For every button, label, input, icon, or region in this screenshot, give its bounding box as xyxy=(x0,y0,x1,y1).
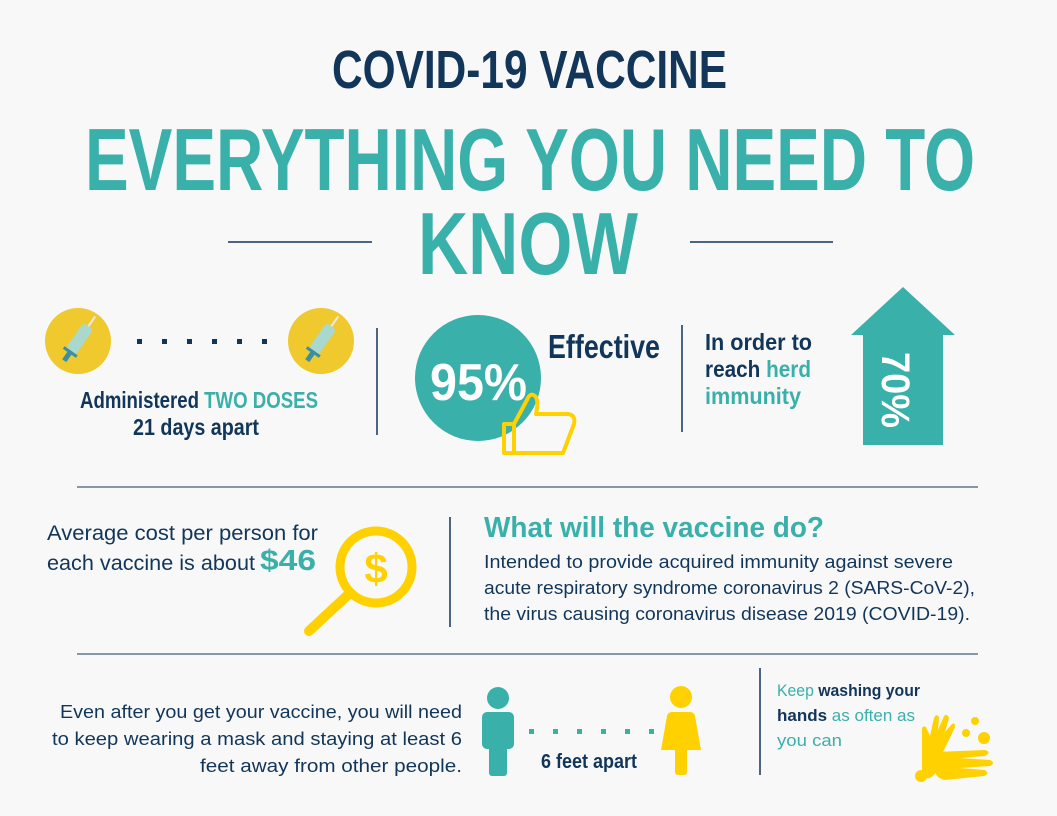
icon: magnifier: $ xyxy=(364,545,388,592)
panel: what will the vaccine do: Intended to provide acquired immunity against severe xyxy=(484,552,953,572)
panel: what will the vaccine do: the virus causing coronavirus disease 2019 (COVID-19). xyxy=(484,604,970,624)
icon: syringe 1 xyxy=(45,308,111,374)
panel: 95% effective: 95% xyxy=(430,354,527,412)
panel: 95% effective xyxy=(415,315,660,453)
icon: yellow person xyxy=(661,686,701,775)
title: KNOW xyxy=(418,194,638,293)
panel: masks and distance: feet away from other people. xyxy=(200,756,462,776)
panel: what will the vaccine do xyxy=(484,512,975,624)
panel: hand washing xyxy=(777,681,993,782)
panel: herd immunity xyxy=(705,287,955,445)
panel: hand washing: you can xyxy=(777,731,842,750)
panel: masks and distance xyxy=(52,686,701,776)
panel: masks and distance: Even after you get your vaccine, you will need xyxy=(60,702,462,722)
panel: cost: Average cost per person for xyxy=(47,522,318,545)
panel: hand washing: hands as often as xyxy=(777,706,915,725)
icon: teal person xyxy=(482,687,514,776)
panel: herd immunity: reach herd xyxy=(705,356,811,382)
panel: what will the vaccine do: acute respiratory syndrome coronavirus 2 (SARS-CoV-2), xyxy=(484,578,975,598)
panel: 95% effective: Effective xyxy=(548,328,660,365)
panel: herd immunity: In order to xyxy=(705,329,812,355)
panel: masks and distance: to keep wearing a mask and staying at least 6 xyxy=(52,729,462,749)
panel: two doses xyxy=(45,308,354,440)
panel: herd immunity: immunity xyxy=(705,383,801,409)
panel: two doses: 21 days apart xyxy=(133,414,259,440)
icon: thumbs up xyxy=(504,395,574,453)
icon: syringe 2 xyxy=(288,308,354,374)
panel: cost: each vaccine is about xyxy=(47,552,255,575)
icon: arrow 70% xyxy=(851,287,955,445)
panel: hand washing: Keep washing your xyxy=(777,681,920,700)
panel: masks and distance: 6 feet apart xyxy=(541,751,637,773)
title: COVID-19 VACCINE xyxy=(332,40,727,100)
panel: two doses: Administered TWO DOSES xyxy=(80,387,318,413)
panel: what will the vaccine do: What will the vaccine do? xyxy=(484,512,824,544)
icon: arrow 70%: 70% xyxy=(873,352,917,428)
icon: washing hands xyxy=(915,715,993,782)
panel: cost xyxy=(47,522,412,631)
panel: cost: $46 xyxy=(260,545,316,577)
icon: magnifier xyxy=(309,531,412,631)
title xyxy=(85,40,975,293)
